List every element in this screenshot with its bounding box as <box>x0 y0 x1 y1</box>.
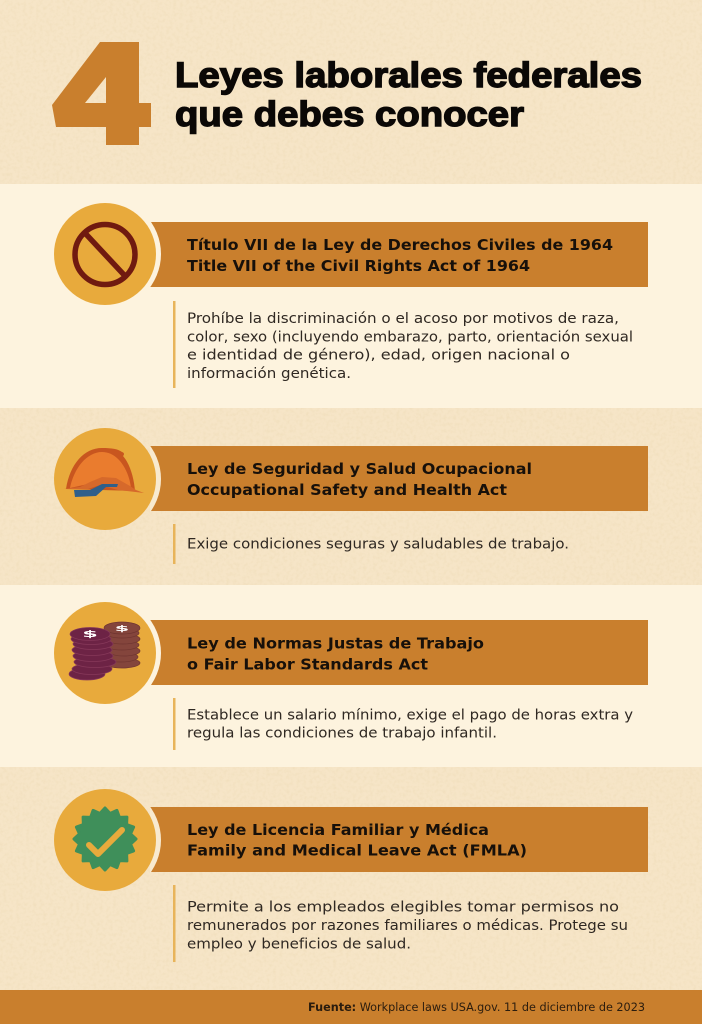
text block: FMLA description <box>173 885 628 962</box>
text block: FLSA description: Establece un salario mínimo, exige el pago de horas extra y <box>187 708 633 724</box>
heading banner: FMLA: Ley de Licencia Familiar y Médica <box>187 821 489 839</box>
icon: hard hat <box>54 428 161 530</box>
icon: coin stacks <box>54 602 161 704</box>
title: que debes conocer <box>175 95 524 134</box>
heading banner: OSHA <box>150 446 648 511</box>
text block: OSHA description: Exige condiciones seguras y saludables de trabajo. <box>187 537 569 553</box>
heading banner: FLSA: o Fair Labor Standards Act <box>187 655 429 673</box>
text block: Title VII description <box>173 301 633 388</box>
title: Leyes laborales federales <box>175 56 642 95</box>
text block: FMLA description: Permite a los empleados elegibles tomar permisos no <box>187 900 619 916</box>
icon: coin stacks: $ <box>82 629 98 639</box>
band: section 1 background <box>0 184 702 408</box>
footer: source: Fuente: Workplace laws USA.gov. 11 de diciembre de 2023 <box>308 1001 645 1014</box>
band: section 3 background <box>0 585 702 767</box>
heading banner: Title VII <box>150 222 648 287</box>
heading banner: FMLA: Family and Medical Leave Act (FMLA) <box>187 842 527 860</box>
icon: green verified badge <box>54 789 161 891</box>
heading banner: Title VII: Title VII of the Civil Rights Act of 1964 <box>187 257 530 275</box>
title <box>175 56 642 134</box>
heading banner: OSHA: Ley de Seguridad y Salud Ocupacional <box>187 460 532 478</box>
icon: prohibition sign <box>54 203 161 305</box>
text block: FLSA description <box>173 698 633 750</box>
heading banner: FMLA <box>150 807 648 872</box>
panel: FLSA <box>49 597 648 750</box>
text block: Title VII description: color, sexo (incluyendo embarazo, parto, orientación sexual <box>187 330 633 346</box>
heading banner: Title VII: Título VII de la Ley de Derechos Civiles de 1964 <box>187 236 613 254</box>
footer: source <box>0 990 702 1024</box>
icon: coin stacks: $ <box>115 624 129 633</box>
heading banner: FLSA: Ley de Normas Justas de Trabajo <box>187 634 484 652</box>
text block: Title VII description: información genética. <box>187 366 351 382</box>
panel: Title VII <box>49 198 648 388</box>
text block: FMLA description: remunerados por razones familiares o médicas. Protege su <box>187 918 628 934</box>
text block: FMLA description: empleo y beneficios de salud. <box>187 936 411 952</box>
panel: OSHA <box>49 423 648 564</box>
heading banner: OSHA: Occupational Safety and Health Act <box>187 481 508 499</box>
panel: FMLA <box>49 784 648 962</box>
text block: Title VII description: Prohíbe la discriminación o el acoso por motivos de raza, <box>187 311 619 327</box>
text block: Title VII description: e identidad de género), edad, origen nacional o <box>187 348 570 364</box>
heading banner: FLSA <box>150 620 648 685</box>
text block: FLSA description: regula las condiciones de trabajo infantil. <box>187 726 497 742</box>
number 4 <box>52 42 151 145</box>
